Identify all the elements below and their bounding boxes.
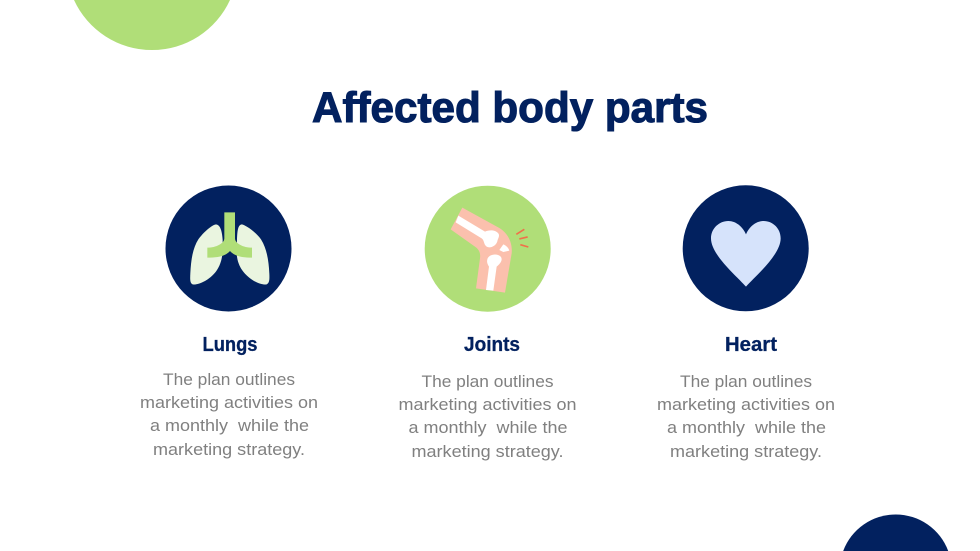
text block: joints description: a monthly while the: [408, 418, 568, 437]
text block: heart description: marketing activities on: [657, 395, 835, 414]
text block: lungs description: The plan outlines: [163, 370, 295, 389]
text block: joints description: marketing activities on: [398, 395, 576, 414]
text block: lungs description: a monthly while the: [150, 416, 309, 435]
panel: lungs: [140, 186, 318, 459]
text block: heart description: marketing strategy.: [670, 442, 822, 461]
decorative navy circle, bottom right: [843, 514, 948, 551]
title: Affected body parts: [312, 84, 708, 132]
text block: heart description: a monthly while the: [667, 418, 826, 437]
text block: joints description: marketing strategy.: [412, 442, 564, 461]
icon: lungs: [166, 186, 292, 312]
icon: heart: [683, 185, 809, 311]
label: Heart: Heart: [725, 334, 777, 356]
panel: heart: [657, 185, 835, 461]
text block: lungs description: [140, 370, 318, 459]
decorative green circle, top left: [74, 0, 230, 50]
label: Lungs: Lungs: [202, 334, 258, 356]
text block: lungs description: marketing activities on: [140, 393, 318, 412]
panel: joints: [398, 186, 576, 461]
text block: joints description: [398, 372, 576, 461]
text block: joints description: The plan outlines: [422, 372, 554, 391]
text block: heart description: The plan outlines: [680, 372, 812, 391]
label: Joints: Joints: [464, 334, 520, 356]
text block: lungs description: marketing strategy.: [153, 440, 305, 459]
text block: heart description: [657, 372, 835, 461]
icon: knee joint: [425, 186, 551, 312]
